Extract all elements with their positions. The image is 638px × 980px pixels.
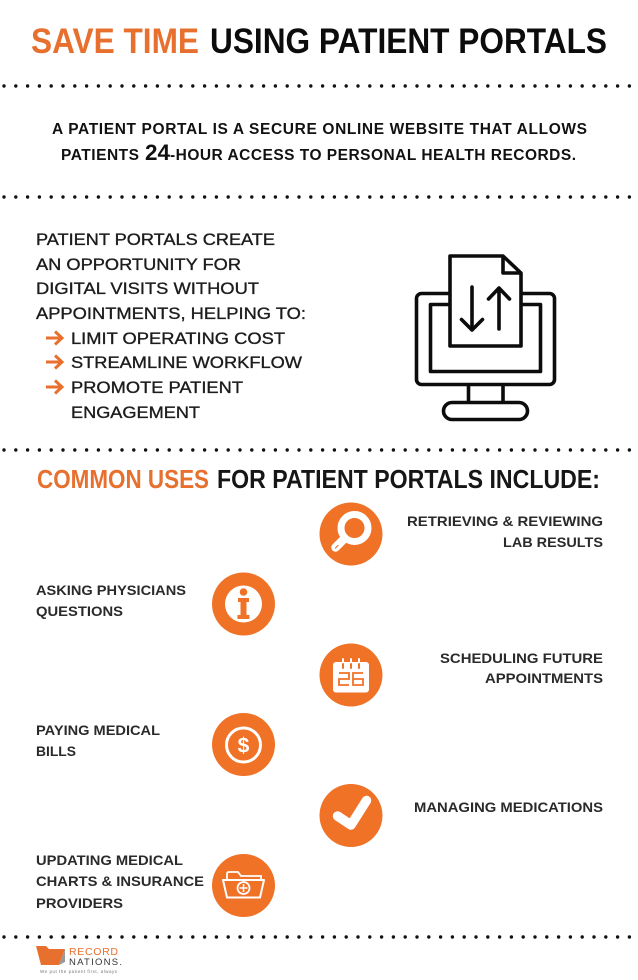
use: physician questions: QUESTIONS xyxy=(36,603,123,619)
icon: magnifying glass xyxy=(320,502,382,566)
use: scheduling xyxy=(440,650,603,686)
title: USING PATIENT PORTALS xyxy=(210,22,607,61)
intro text: A PATIENT PORTAL IS A SECURE ONLINE WEBSITE THAT ALLOWS xyxy=(52,121,587,138)
use: medical bills: PAYING MEDICAL xyxy=(36,722,160,738)
intro text: -HOUR ACCESS TO PERSONAL HEALTH RECORDS. xyxy=(170,147,576,164)
use: lab results: RETRIEVING & REVIEWING xyxy=(407,513,603,529)
text block: portal benefits: PATIENT PORTALS CREATE xyxy=(36,230,275,249)
use: medical charts: UPDATING MEDICAL xyxy=(36,852,183,868)
text block: portal benefits: LIMIT OPERATING COST xyxy=(71,329,285,348)
use: medical charts: PROVIDERS xyxy=(36,895,123,911)
text block: portal benefits: DIGITAL VISITS WITHOUT xyxy=(36,279,259,298)
icon: check mark xyxy=(320,784,382,847)
text block: portal benefits: STREAMLINE WORKFLOW xyxy=(71,353,302,372)
use: medical bills xyxy=(36,722,160,759)
icon: monitor with document xyxy=(416,256,554,420)
icon: calendar xyxy=(320,644,382,706)
use: physician questions xyxy=(36,582,186,619)
heading: common uses: FOR PATIENT PORTALS INCLUDE: xyxy=(217,464,600,494)
text block: portal benefits: ENGAGEMENT xyxy=(71,403,200,422)
text block: portal benefits xyxy=(36,230,306,422)
logo: Record Nations: We put the patient first, always xyxy=(40,969,118,974)
icon: list arrows xyxy=(46,332,62,394)
use: medications: MANAGING MEDICATIONS xyxy=(414,799,603,815)
text block: portal benefits: AN OPPORTUNITY FOR xyxy=(36,255,241,274)
icon: information xyxy=(212,572,275,636)
icon: dollar coin xyxy=(212,713,275,776)
text block: portal benefits: PROMOTE PATIENT xyxy=(71,378,243,397)
logo: Record Nations xyxy=(36,946,122,974)
heading: common uses: COMMON USES xyxy=(37,464,209,494)
intro text: PATIENTS xyxy=(61,147,139,164)
use: medical charts: CHARTS & INSURANCE xyxy=(36,873,204,889)
title: SAVE TIME xyxy=(31,22,199,61)
intro text xyxy=(52,121,587,165)
use: medical bills: BILLS xyxy=(36,743,76,759)
logo: Record Nations: NATIONS. xyxy=(69,957,122,968)
use: physician questions: ASKING PHYSICIANS xyxy=(36,582,186,598)
title xyxy=(31,22,607,61)
icon: medical folder xyxy=(212,854,275,917)
text block: portal benefits: APPOINTMENTS, HELPING TO: xyxy=(36,304,306,323)
icon: dollar coin: $ xyxy=(238,734,250,758)
logo: Record Nations: RECORD xyxy=(69,946,118,958)
use: lab results xyxy=(407,513,603,550)
use: lab results: LAB RESULTS xyxy=(503,534,603,550)
use: medical charts xyxy=(36,852,204,911)
heading: common uses xyxy=(37,464,600,494)
intro text: 24 xyxy=(145,140,171,165)
use: scheduling: SCHEDULING FUTURE xyxy=(440,650,603,666)
use: scheduling: APPOINTMENTS xyxy=(485,670,603,686)
